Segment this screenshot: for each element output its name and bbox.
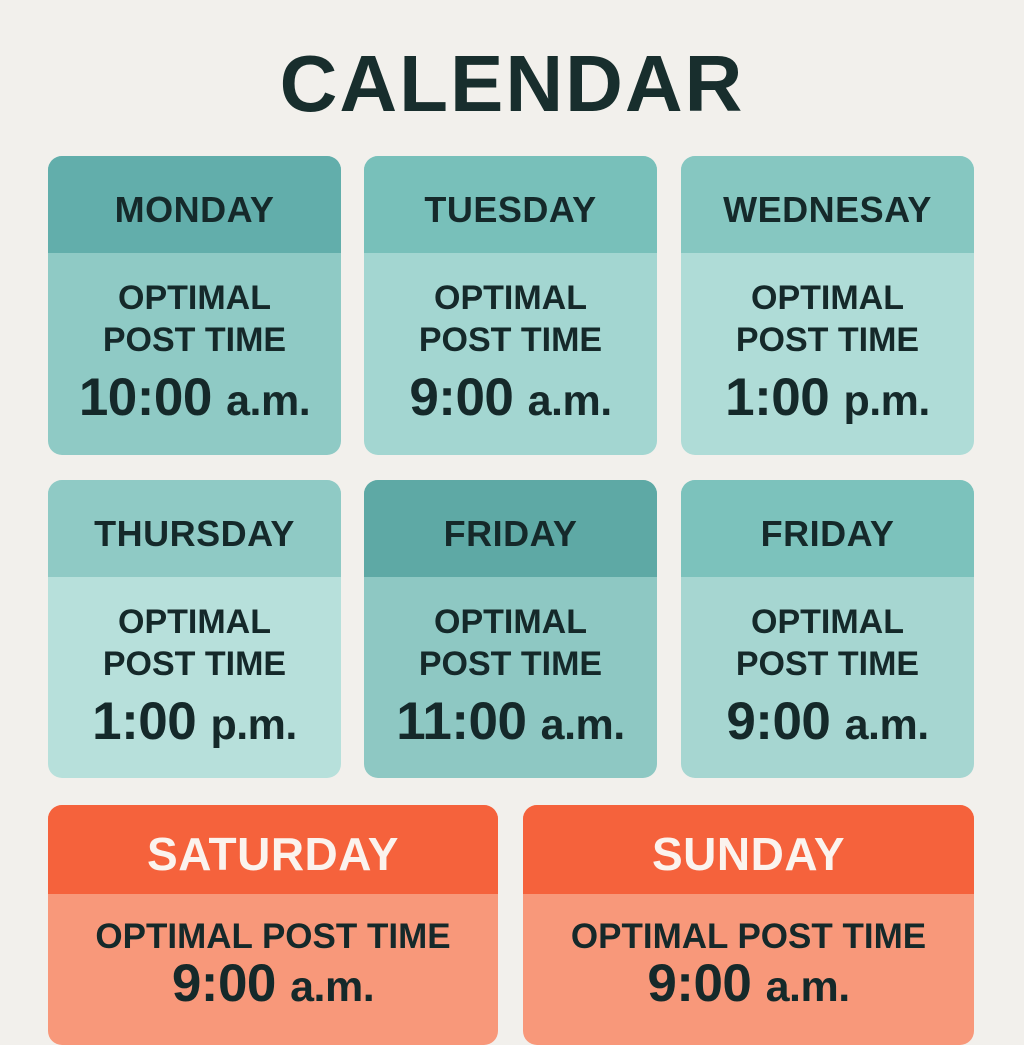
panel: sunday — [523, 805, 974, 1045]
panel: tuesday: 9:00 a.m. — [409, 368, 612, 427]
panel: tuesday: TUESDAY — [424, 188, 597, 230]
panel: friday 2: FRIDAY — [761, 512, 894, 554]
panel: wednesday — [681, 156, 974, 455]
panel: thursday — [48, 480, 341, 778]
panel: wednesday: POST TIME — [736, 321, 919, 359]
panel: saturday — [48, 805, 498, 1045]
panel: friday: FRIDAY — [444, 512, 577, 554]
panel: wednesday: 1:00 p.m. — [725, 368, 930, 427]
panel: friday 2: POST TIME — [736, 645, 919, 683]
panel: thursday: POST TIME — [103, 645, 286, 683]
panel: wednesday: OPTIMAL — [751, 279, 904, 317]
title: CALENDAR — [280, 39, 744, 128]
panel: friday — [364, 480, 657, 778]
panel: monday: MONDAY — [115, 188, 274, 230]
panel: friday: 11:00 a.m. — [396, 692, 625, 751]
panel: thursday: OPTIMAL — [118, 603, 271, 641]
panel: wednesday: WEDNESAY — [723, 188, 932, 230]
panel: monday: OPTIMAL — [118, 279, 271, 317]
panel: sunday: 9:00 a.m. — [647, 954, 850, 1013]
panel: monday: 10:00 a.m. — [79, 368, 310, 427]
panel: saturday: SATURDAY — [147, 828, 399, 880]
panel: friday 2: OPTIMAL — [751, 603, 904, 641]
panel: saturday: 9:00 a.m. — [172, 954, 374, 1013]
panel: friday 2 — [681, 480, 974, 778]
panel: tuesday: OPTIMAL — [434, 279, 587, 317]
panel: monday — [48, 156, 341, 455]
panel: thursday: THURSDAY — [94, 512, 295, 554]
panel: sunday: SUNDAY — [652, 828, 845, 880]
panel: thursday: 1:00 p.m. — [92, 692, 297, 751]
panel: friday 2: 9:00 a.m. — [726, 692, 929, 751]
panel: friday: OPTIMAL — [434, 603, 587, 641]
panel: sunday: OPTIMAL POST TIME — [571, 917, 926, 956]
panel: saturday: OPTIMAL POST TIME — [95, 917, 451, 956]
panel: tuesday — [364, 156, 657, 455]
panel: monday: POST TIME — [103, 321, 286, 359]
panel: friday: POST TIME — [419, 645, 602, 683]
panel: tuesday: POST TIME — [419, 321, 602, 359]
